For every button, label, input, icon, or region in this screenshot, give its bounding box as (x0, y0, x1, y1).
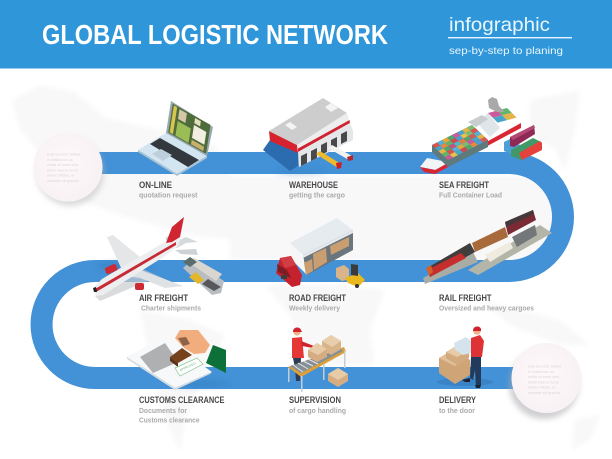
label: warehouse (289, 180, 345, 200)
callout: right circle: mollis sit amet urna. (528, 375, 560, 379)
callout: right circle: metus efficitur, ut (528, 386, 555, 390)
label: supervision: SUPERVISION (289, 395, 341, 405)
label: warehouse: getting the cargo (289, 190, 345, 200)
callout: left circle (34, 132, 104, 206)
label: customs clearance (139, 395, 224, 424)
label: delivery: to the door (439, 406, 475, 415)
label: rail freight (439, 293, 534, 312)
icon: supervision conveyor and worker (288, 327, 348, 392)
icon: delivery worker with boxes (437, 326, 493, 388)
label: delivery (439, 395, 476, 415)
header banner (0, 0, 612, 68)
icon: warehouse (263, 98, 353, 171)
label: sea freight (439, 180, 502, 200)
label: sea freight: SEA FREIGHT (439, 180, 489, 190)
subtitle (448, 14, 572, 57)
label: supervision: of cargo handling (289, 406, 346, 415)
label: air freight (139, 293, 201, 312)
icon: airplane (93, 217, 224, 301)
label: on-line (139, 180, 198, 200)
icon: road truck (276, 218, 365, 288)
label: road freight (289, 293, 346, 312)
icon: laptop (138, 101, 213, 176)
subtitle: sep-by-step to planing (449, 46, 563, 57)
label: customs clearance: CUSTOMS CLEARANCE (139, 395, 224, 405)
ship containers (432, 125, 488, 160)
label: delivery: DELIVERY (439, 395, 476, 405)
label: customs clearance: Documents for (139, 406, 187, 415)
callout: right circle: molestie est gravida. (528, 391, 561, 395)
callout: left circle: metus efficitur, ut (47, 174, 74, 178)
label: on-line: quotation request (139, 190, 198, 200)
icon: freight train (423, 210, 552, 284)
label: air freight: AIR FREIGHT (139, 293, 188, 303)
yellow tanker truck (316, 151, 342, 169)
title: GLOBAL LOGISTIC NETWORK (42, 19, 388, 50)
band shadow accents (97, 170, 325, 387)
label: rail freight: Oversized and heavy cargoes (439, 304, 534, 312)
label: on-line: ON-LINE (139, 180, 172, 190)
serpentine route band (42, 163, 563, 378)
callout: left circle: molestie est gravida. (47, 179, 80, 183)
icon: container ship (420, 97, 542, 174)
label: rail freight: RAIL FREIGHT (439, 293, 492, 303)
white trailer truck (328, 145, 353, 161)
label: air freight: Charter shipments (141, 304, 201, 312)
label: customs clearance: Customs clearance (139, 416, 200, 424)
background world map (12, 85, 600, 452)
callout: right circle: Duis leo eros, finibus (528, 364, 562, 368)
callout: left circle: in vestibulum ac, (47, 158, 74, 162)
icon: customs document and stamp: APPROVED (179, 361, 197, 372)
callout: right circle (509, 343, 582, 419)
callout: right circle: in vestibulum ac, (528, 370, 555, 374)
label: sea freight: Full Container Load (439, 190, 502, 200)
label: road freight: Weekly delivery (289, 304, 341, 312)
callout: left circle: mollis sit amet urna. (47, 163, 79, 167)
subtitle: infographic (449, 14, 550, 36)
label: warehouse: WAREHOUSE (289, 180, 338, 190)
forklift with boxes (336, 264, 365, 288)
callout: left circle: Duis leo eros, finibus (47, 152, 81, 156)
callout: left circle: Morbi viverra dui at (47, 168, 78, 172)
airport cargo loader (183, 257, 224, 295)
label: road freight: ROAD FREIGHT (289, 293, 346, 303)
label: supervision (289, 395, 346, 415)
callout: right circle: Morbi viverra dui at (528, 380, 559, 384)
cargo boxes (308, 335, 348, 387)
icon: customs document and stamp (127, 330, 226, 390)
stacked cargo containers (504, 125, 542, 160)
